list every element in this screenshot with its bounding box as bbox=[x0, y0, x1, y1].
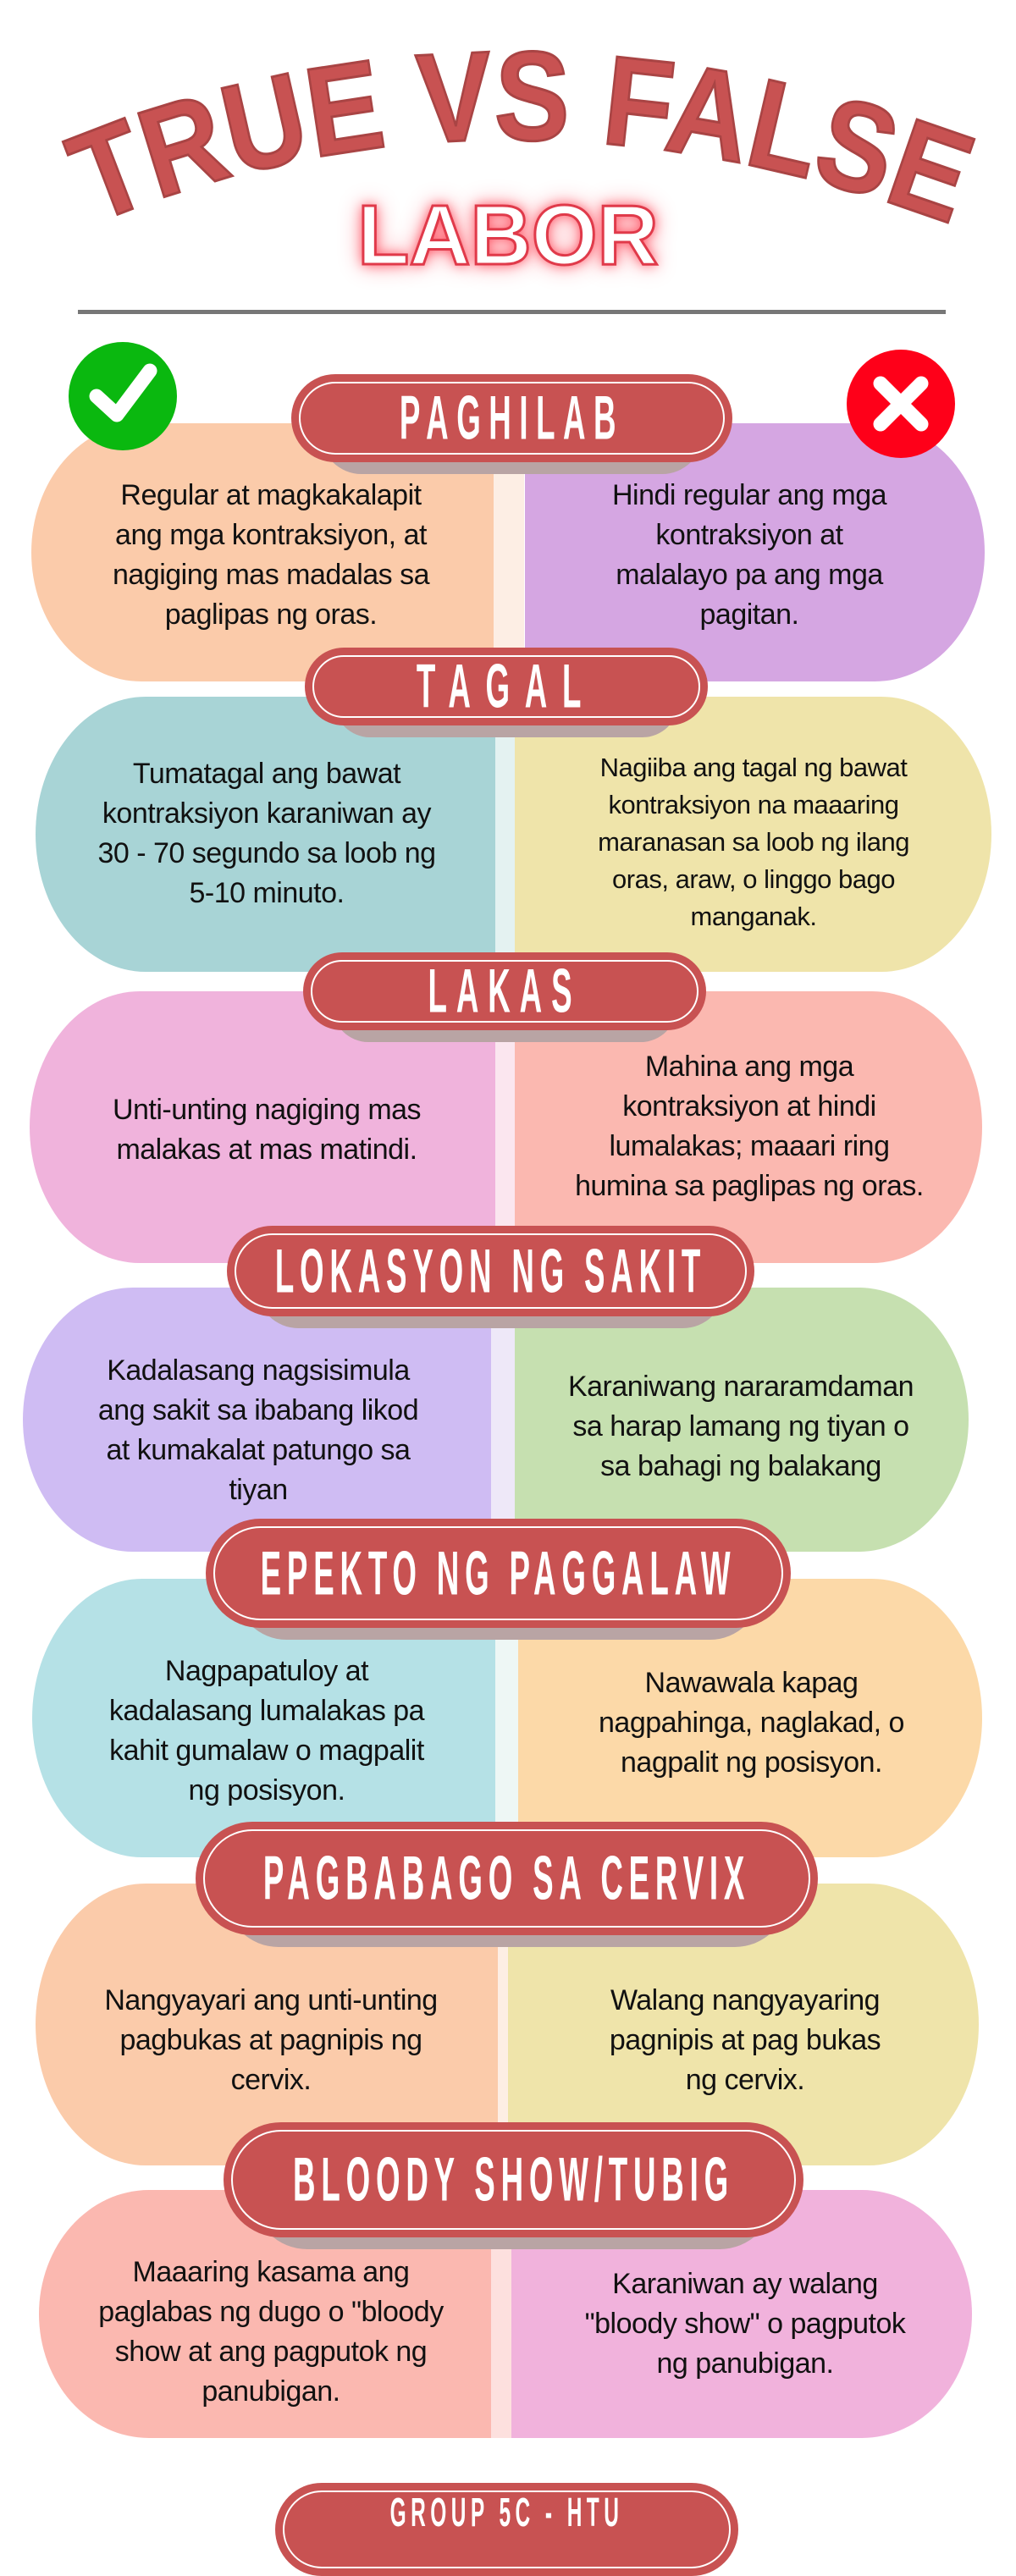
divider line bbox=[78, 310, 946, 314]
text: cervix true bbox=[104, 1984, 438, 2096]
text: tagal true: 5-10 minuto. bbox=[189, 877, 344, 909]
section 7 panels bbox=[39, 2190, 972, 2438]
text: epekto false: Nawawala kapag bbox=[645, 1666, 858, 1698]
text: lokasyon false bbox=[568, 1370, 914, 1481]
heading pill: EPEKTO NG PAGGALAW bbox=[206, 1519, 791, 1640]
subtitle: LABOR: LABOR bbox=[357, 188, 659, 283]
text: lokasyon false: sa bahagi ng balakang bbox=[600, 1449, 881, 1481]
section 2 panels bbox=[36, 697, 991, 972]
text: lokasyon false: sa harap lamang ng tiyan o bbox=[572, 1410, 909, 1442]
heading pill: BLOODY SHOW/TUBIG: BLOODY SHOW/TUBIG bbox=[293, 2145, 734, 2215]
heading pill: LOKASYON NG SAKIT: LOKASYON NG SAKIT bbox=[275, 1237, 706, 1305]
heading pill: LAKAS: LAKAS bbox=[428, 957, 581, 1026]
text: lokasyon true: Kadalasang nagsisimula bbox=[107, 1354, 410, 1387]
text: lakas true bbox=[113, 1094, 421, 1166]
text: paghilab false bbox=[612, 479, 887, 631]
text: cervix false bbox=[610, 1984, 881, 2096]
text: bloody show false: ng panubigan. bbox=[656, 2347, 834, 2379]
text: paghilab false: malalayo pa ang mga bbox=[616, 559, 883, 591]
text: bloody show true bbox=[98, 2256, 444, 2408]
text: lakas false: kontraksiyon at hindi bbox=[622, 1090, 876, 1123]
text: paghilab false: Hindi regular ang mga bbox=[612, 479, 886, 511]
text: paghilab true: nagiging mas madalas sa bbox=[113, 559, 429, 591]
footer pill: GROUP 5C - HTU: GROUP 5C - HTU bbox=[390, 2489, 623, 2535]
text: lakas false bbox=[575, 1051, 924, 1202]
text: epekto true bbox=[109, 1655, 425, 1807]
text: cervix false: Walang nangyayaring bbox=[610, 1984, 880, 2016]
heading pill: EPEKTO NG PAGGALAW: EPEKTO NG PAGGALAW bbox=[261, 1539, 736, 1608]
text: paghilab true: paglipas ng oras. bbox=[165, 598, 377, 631]
text: bloody show false: Karaniwan ay walang bbox=[612, 2267, 878, 2299]
text: paghilab false: kontraksiyon at bbox=[655, 519, 843, 551]
section 6 panels bbox=[36, 1884, 979, 2165]
text: bloody show true: show at ang pagputok ng bbox=[115, 2336, 427, 2368]
heading pill: PAGHILAB: PAGHILAB bbox=[400, 384, 624, 452]
text: cervix true: Nangyayari ang unti-unting bbox=[104, 1984, 438, 2016]
text: tagal false: maranasan sa loob ng ilang bbox=[598, 827, 909, 857]
text: cervix false: ng cervix. bbox=[686, 2064, 804, 2096]
footer pill: GROUP 5C - HTU bbox=[275, 2483, 738, 2576]
text: tagal false: Nagiiba ang tagal ng bawat bbox=[600, 753, 907, 782]
text: tagal false: oras, araw, o linggo bago bbox=[612, 864, 895, 894]
text: tagal false: manganak. bbox=[691, 902, 816, 931]
text: epekto false: nagpalit ng posisyon. bbox=[621, 1746, 882, 1778]
text: cervix false: pagnipis at pag bukas bbox=[610, 2023, 881, 2055]
section 4 panels bbox=[23, 1288, 969, 1552]
text: bloody show true: paglabas ng dugo o "bloody bbox=[98, 2296, 444, 2328]
text: lakas false: humina sa paglipas ng oras. bbox=[575, 1170, 924, 1202]
text: bloody show false: "bloody show" o pagputok bbox=[585, 2308, 905, 2340]
text: tagal true: Tumatagal ang bawat bbox=[133, 758, 400, 790]
text: epekto true: kahit gumalaw o magpalit bbox=[109, 1735, 424, 1767]
text: lakas false: Mahina ang mga bbox=[645, 1051, 853, 1083]
text: epekto false: nagpahinga, naglakad, o bbox=[599, 1707, 904, 1739]
section 3 panels bbox=[30, 991, 982, 1263]
text: lokasyon true: tiyan bbox=[229, 1474, 288, 1506]
text: bloody show false bbox=[585, 2267, 906, 2379]
title: TRUE VS FALSE: TRUE VS FALSE bbox=[61, 50, 975, 224]
text: paghilab false: pagitan. bbox=[699, 598, 799, 631]
text: cervix true: cervix. bbox=[231, 2064, 311, 2096]
text: epekto true: kadalasang lumalakas pa bbox=[109, 1695, 424, 1727]
text: bloody show true: Maaaring kasama ang bbox=[133, 2256, 409, 2288]
section 5 panels bbox=[32, 1579, 982, 1857]
text: tagal true bbox=[97, 758, 436, 909]
text: paghilab true: Regular at magkakalapit bbox=[120, 479, 422, 511]
heading pill: LAKAS bbox=[303, 952, 706, 1042]
text: paghilab true: ang mga kontraksiyon, at bbox=[115, 519, 427, 551]
text: epekto true: ng posisyon. bbox=[189, 1774, 345, 1807]
text: lokasyon true bbox=[98, 1354, 418, 1506]
icon: red x bbox=[847, 350, 955, 458]
heading pill: BLOODY SHOW/TUBIG bbox=[224, 2122, 803, 2249]
heading pill: TAGAL: TAGAL bbox=[417, 652, 596, 721]
text: lokasyon false: Karaniwang nararamdaman bbox=[568, 1370, 914, 1402]
heading pill: LOKASYON NG SAKIT bbox=[227, 1226, 754, 1328]
text: epekto true: Nagpapatuloy at bbox=[165, 1655, 368, 1687]
text: tagal true: 30 - 70 segundo sa loob ng bbox=[97, 837, 436, 869]
text: lokasyon true: ang sakit sa ibabang likod bbox=[98, 1394, 418, 1426]
text: tagal false bbox=[598, 753, 909, 931]
text: cervix true: pagbukas at pagnipis ng bbox=[119, 2023, 422, 2055]
heading pill: PAGBABAGO SA CERVIX bbox=[196, 1822, 818, 1947]
text: bloody show true: panubigan. bbox=[202, 2375, 340, 2408]
text: lakas true: Unti-unting nagiging mas bbox=[113, 1094, 421, 1126]
icon: green check bbox=[69, 342, 177, 450]
text: tagal false: kontraksiyon na maaaring bbox=[608, 790, 898, 819]
text: lakas true: malakas at mas matindi. bbox=[116, 1134, 417, 1166]
text: lakas false: lumalakas; maaari ring bbox=[609, 1130, 889, 1162]
heading pill: PAGBABAGO SA CERVIX: PAGBABAGO SA CERVIX bbox=[263, 1844, 750, 1913]
text: tagal true: kontraksiyon karaniwan ay bbox=[102, 797, 431, 830]
text: paghilab true bbox=[113, 479, 430, 631]
heading pill: PAGHILAB bbox=[291, 374, 732, 474]
section 1 panels bbox=[31, 423, 985, 681]
text: lokasyon true: at kumakalat patungo sa bbox=[107, 1434, 410, 1466]
text: epekto false bbox=[599, 1666, 904, 1778]
heading pill: TAGAL bbox=[305, 648, 708, 737]
